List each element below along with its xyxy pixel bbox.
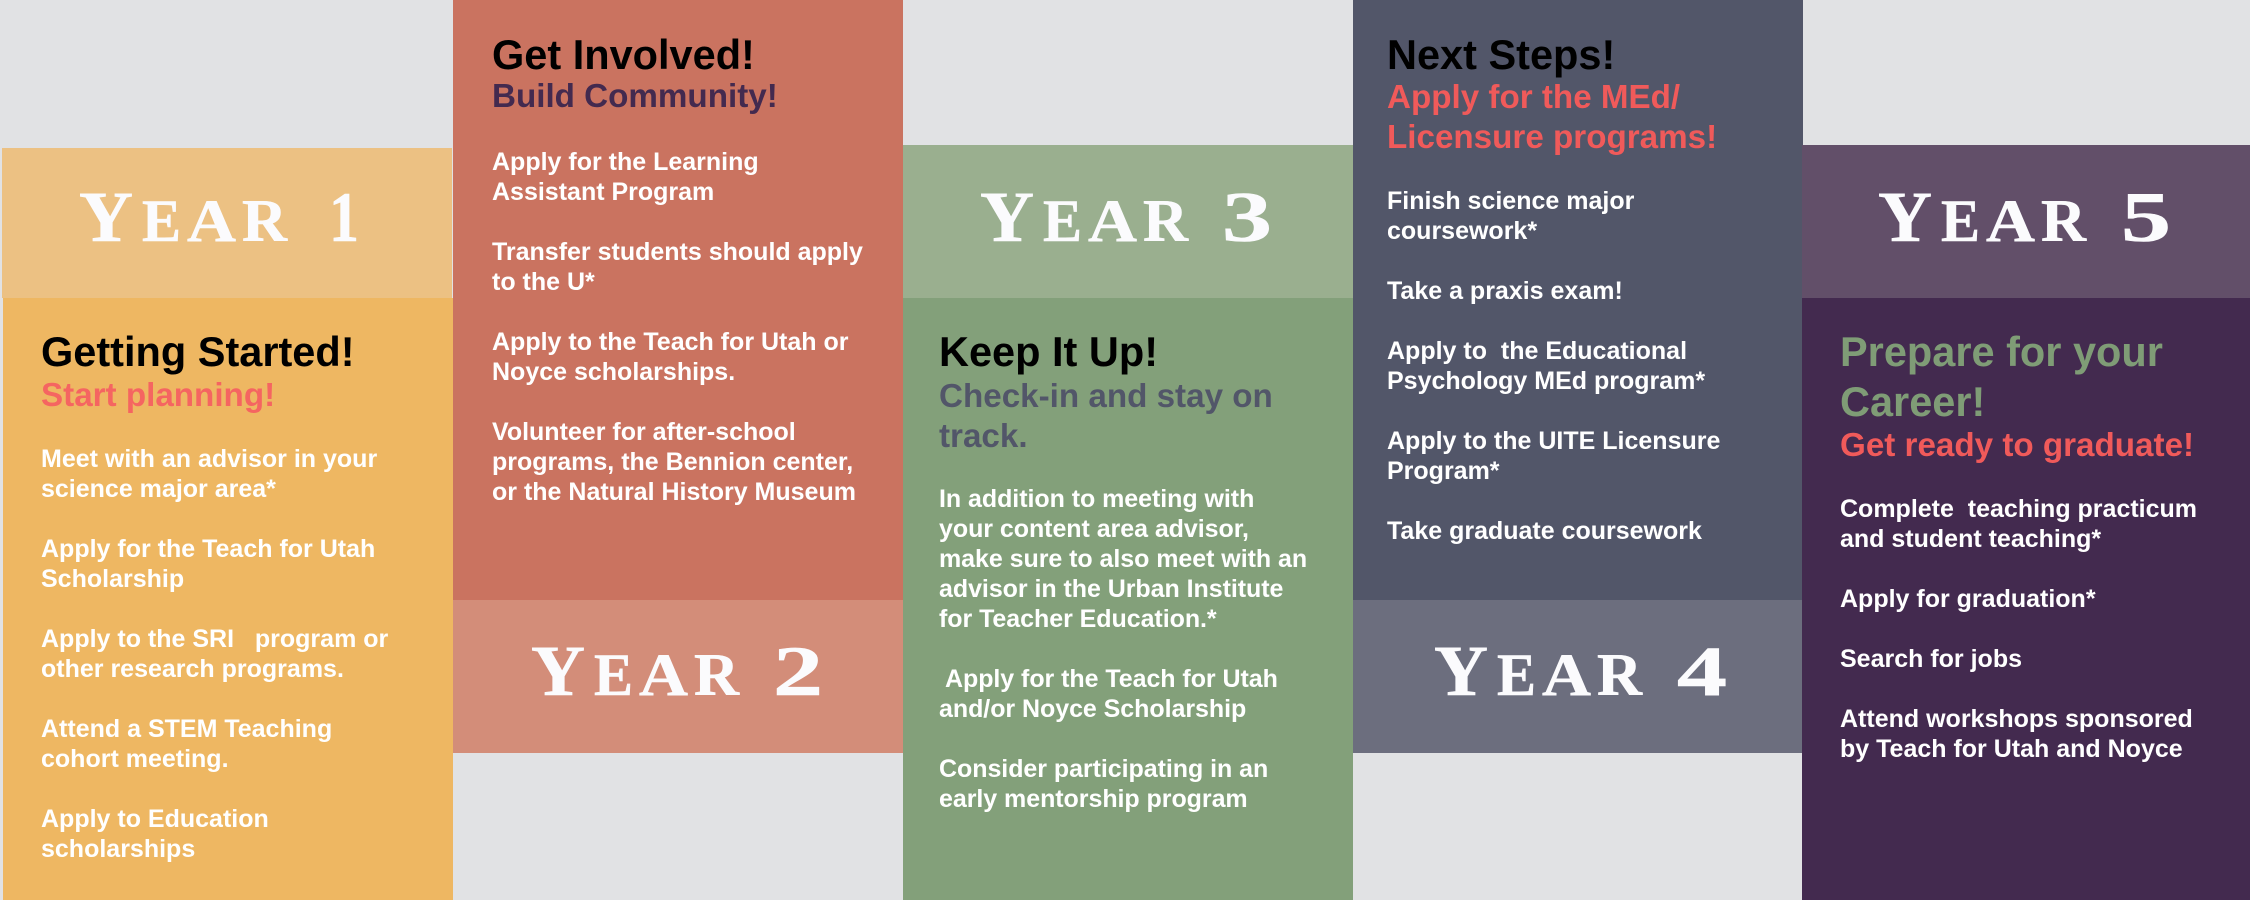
year 5 heading: Prepare for your Career!	[1840, 328, 2163, 425]
year 4 banner: Y	[1434, 631, 1488, 711]
year 5 banner: R	[2041, 188, 2087, 254]
year 5 task list: Complete teaching practicum and student teaching* Apply for graduation* Search for jobs Attend workshops sponsored by Teach for Utah and Noyce	[1840, 495, 2197, 763]
year 5 body background	[1802, 298, 2250, 900]
year 3 banner: R	[1143, 188, 1189, 254]
year 5 banner	[1802, 145, 2250, 298]
year 4 task list: Finish science major coursework* Take a praxis exam! Apply to the Educational Psychology MEd program* Apply to the UITE Licensure Program* Take graduate coursework	[1387, 187, 1720, 545]
year 1 banner: 1	[329, 179, 359, 257]
year 1 body background	[3, 298, 453, 900]
year 4 banner	[1353, 600, 1803, 753]
year 3 banner: Y	[980, 177, 1034, 257]
year 2 banner	[453, 600, 903, 753]
year 2 banner: R	[694, 642, 740, 708]
year 1 heading: Getting Started!	[41, 328, 355, 375]
year 1 banner: R	[242, 188, 288, 254]
panel: year 2	[453, 0, 903, 753]
year 3 banner: E	[1043, 188, 1082, 254]
year 4 banner: A	[1542, 642, 1591, 708]
year 1 banner: E	[142, 188, 181, 254]
year 2 banner: E	[594, 642, 633, 708]
year 1 task list: Meet with an advisor in your science major area* Apply for the Teach for Utah Scholarship Apply to the SRI program or other research programs. Attend a STEM Teaching cohort meeting. Apply to Education scholarships	[41, 445, 388, 863]
year 4 banner: E	[1497, 642, 1536, 708]
year 5 banner: A	[1986, 188, 2035, 254]
year 2 subheading: Build Community!	[492, 78, 778, 115]
year 3 banner	[903, 145, 1353, 298]
year 3 banner: 3	[1222, 179, 1272, 257]
year 5 subheading: Get ready to graduate!	[1840, 427, 2194, 464]
year 3 task list: In addition to meeting with your content area advisor, make sure to also meet with an advisor in the Urban Institute for Teacher Education.* Apply for the Teach for Utah and/or Noyce Scholarship Consider participating in an early mentorship program	[939, 485, 1307, 813]
year 3 banner: A	[1088, 188, 1137, 254]
year 2 task list: Apply for the Learning Assistant Program Transfer students should apply to the U* Apply to the Teach for Utah or Noyce scholarships. Volunteer for after-school programs, the Bennion center, or the Natural History Museum	[492, 148, 863, 506]
year 1 banner	[2, 148, 452, 298]
panel: year 3	[903, 145, 1353, 900]
panel: year 1	[2, 148, 453, 900]
year 3 subheading: Check-in and stay on track.	[939, 378, 1273, 455]
panel: year 5	[1802, 145, 2250, 900]
year 1 banner: Y	[79, 177, 133, 257]
year 5 banner: Y	[1878, 177, 1932, 257]
year 2 banner: Y	[531, 631, 585, 711]
year 4 body background	[1353, 0, 1803, 600]
year 4 banner: R	[1597, 642, 1643, 708]
year 2 heading: Get Involved!	[492, 31, 755, 78]
year 4 banner: 4	[1677, 633, 1727, 711]
year 3 heading: Keep It Up!	[939, 328, 1158, 375]
year 1 subheading: Start planning!	[41, 377, 275, 414]
year 4 heading: Next Steps!	[1387, 31, 1615, 78]
year 5 banner: 5	[2121, 179, 2171, 257]
year 2 banner: 2	[773, 633, 823, 711]
year 2 body background	[453, 0, 903, 600]
year 4 subheading: Apply for the MEd/ Licensure programs!	[1387, 79, 1717, 156]
year 2 banner: A	[639, 642, 688, 708]
year 1 banner: A	[187, 188, 236, 254]
panel: year 4	[1353, 0, 1803, 753]
year 5 banner: E	[1941, 188, 1980, 254]
year 3 body background	[903, 298, 1353, 900]
